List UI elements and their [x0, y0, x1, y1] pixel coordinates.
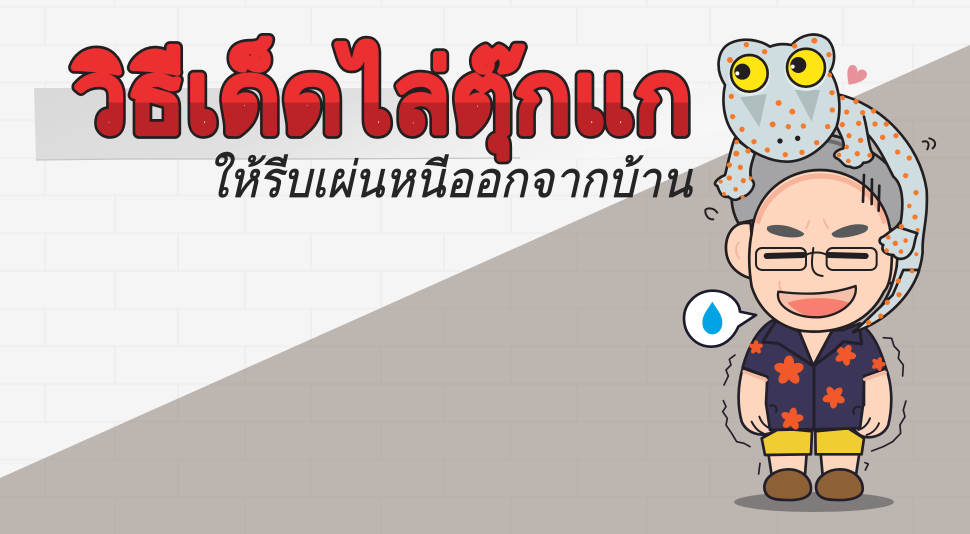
- glasses: [756, 248, 877, 270]
- shirt flowers: [748, 340, 888, 432]
- wiggle marks near gecko: [705, 138, 935, 219]
- eye tear marks: [740, 90, 820, 127]
- gecko body: [705, 35, 935, 273]
- shirt: [743, 320, 886, 430]
- tail tip over shoulder: [853, 269, 919, 332]
- ground shadow: [734, 492, 894, 512]
- subtitle: ให้รีบเผ่นหนีออกจากบ้าน: [206, 152, 694, 208]
- forehead hairline band: [757, 176, 885, 223]
- character: man with gecko on head: [684, 35, 935, 512]
- gecko tail and man's head: [726, 94, 927, 332]
- gecko back foot: [880, 227, 917, 259]
- hair: [732, 133, 906, 230]
- torn paper strip behind title: [34, 88, 745, 160]
- eye glow rings: [728, 54, 770, 96]
- man's lower body: [684, 291, 906, 500]
- sleeve cuffs: [744, 372, 885, 380]
- eyebrows: [767, 224, 868, 238]
- gecko tail: [837, 94, 927, 332]
- title: วิธีเด็ดไล่ตุ๊กแก: [71, 37, 692, 160]
- arms: [739, 368, 891, 437]
- hair shadow: [825, 141, 848, 148]
- water drop: [702, 302, 722, 334]
- finger lines: [752, 405, 879, 435]
- shake lines: [723, 338, 906, 474]
- orange spots: [719, 38, 920, 273]
- shoes: [764, 469, 863, 500]
- gecko eyes: [731, 55, 768, 92]
- collar and placket: [763, 321, 862, 430]
- mouth: [778, 286, 856, 317]
- gecko right leg outline: [834, 117, 873, 168]
- wrinkles and ear detail: [736, 220, 828, 294]
- face: [749, 170, 892, 332]
- speech bubble with water drop: [684, 291, 756, 347]
- gecko right leg fill: [834, 107, 873, 168]
- left ear: [726, 223, 755, 279]
- hair stripes: [863, 175, 879, 211]
- legs: [768, 453, 859, 475]
- squinting eyes: [767, 246, 866, 265]
- gecko left leg: [715, 138, 755, 200]
- nose: [812, 248, 823, 276]
- heart: [847, 65, 867, 85]
- shorts: [762, 428, 864, 455]
- right ear: [887, 233, 921, 283]
- gecko head: [719, 35, 839, 162]
- neck: [799, 330, 832, 365]
- title: วิธีเด็ดไล่ตุ๊กแก: [71, 37, 692, 160]
- nostrils: [777, 138, 783, 144]
